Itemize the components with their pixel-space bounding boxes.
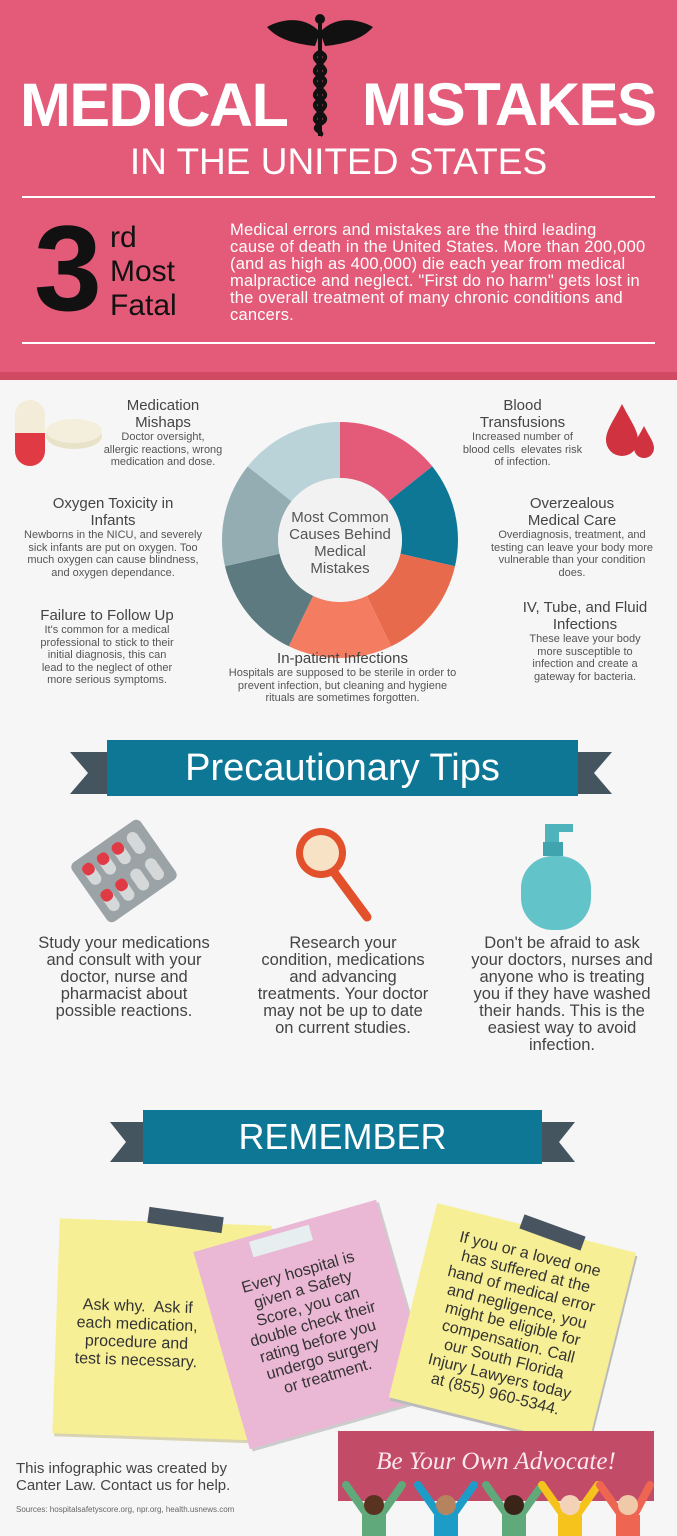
note: lawyers	[389, 1203, 636, 1447]
note: safety score: Every hospital is	[240, 1248, 356, 1296]
intro text: cause of death in the United States. More than 200,000	[230, 238, 645, 256]
cause: in-patient infections: rituals are sometimes forgotten.	[265, 692, 420, 704]
note: lawyers: has suffered at the	[459, 1248, 592, 1296]
tip: ask	[471, 934, 653, 1054]
donut chart: Most Common	[291, 509, 389, 526]
cause: oxygen toxicity: Oxygen Toxicity in	[53, 495, 173, 512]
cause: overzealous care: does.	[559, 566, 585, 578]
banner: remember: REMEMBER	[238, 1116, 447, 1157]
cause: overzealous care: Overdiagnosis, treatment, and	[498, 529, 646, 541]
cause: medication mishaps: medication and dose.	[111, 456, 215, 468]
cause: blood transfusions: blood cells elevates risk	[463, 444, 582, 456]
tip: research: treatments. Your doctor	[258, 985, 428, 1003]
cause: oxygen toxicity: and oxygen dependance.	[51, 566, 175, 578]
intro text: malpractice and neglect. "First do no harm" gets lost in	[230, 272, 640, 290]
intro text: (and as high as 400,000) die each year from medical	[230, 255, 625, 273]
note: lawyers: and negligence, you	[445, 1281, 589, 1333]
note: lawyers: at (855) 960-5344.	[429, 1370, 561, 1419]
cause: failure to follow up: Failure to Follow Up	[40, 607, 174, 624]
intro text: the overall treatment of many chronic conditions and	[230, 289, 623, 307]
tip: ask: Don't be afraid to ask	[484, 934, 640, 952]
note: safety score	[193, 1200, 433, 1449]
tip: medications: Study your medications	[38, 934, 210, 952]
cause: IV infections: IV, Tube, and Fluid	[523, 599, 647, 616]
cause: in-patient infections: prevent infection, but cleaning and hygiene	[238, 680, 447, 692]
note: safety score: double check their	[248, 1298, 378, 1350]
tip: ask: easiest way to avoid	[488, 1019, 636, 1037]
banner: remember	[110, 1110, 575, 1164]
cause: oxygen toxicity: Newborns in the NICU, and severely	[24, 529, 202, 541]
cause: blood transfusions: Blood	[503, 397, 542, 414]
people	[342, 1481, 654, 1536]
icon: pills	[15, 400, 102, 466]
note: safety score: undergo surgery	[264, 1334, 381, 1383]
note: lawyers: hand of medical error	[446, 1263, 597, 1316]
cause: failure to follow up: professional to stick to their	[40, 636, 174, 648]
banner: precautionary tips: Precautionary Tips	[185, 747, 500, 789]
note: ask why: each medication,	[76, 1314, 198, 1335]
cause: oxygen toxicity: much oxygen can cause blindness,	[27, 554, 199, 566]
note: safety score: Score, you can	[254, 1284, 362, 1330]
header panel	[0, 0, 677, 380]
tip: medications	[38, 934, 210, 1020]
cause: oxygen toxicity: sick infants are put on oxygen. Too	[28, 542, 198, 554]
tip: ask: you if they have washed	[473, 985, 651, 1003]
cause: blood transfusions: Increased number of	[472, 431, 573, 443]
cause: IV infections: Infections	[553, 616, 617, 633]
donut chart: Mistakes	[310, 560, 370, 577]
icon: caduceus	[267, 14, 373, 137]
tape strips	[147, 1207, 224, 1233]
cause: medication mishaps: Doctor oversight,	[121, 431, 205, 443]
intro text: Medical errors and mistakes are the third leading	[230, 221, 597, 239]
tip: medications: pharmacist about	[61, 985, 187, 1003]
icon: magnifier	[296, 828, 372, 922]
cause: medication mishaps: Mishaps	[135, 414, 191, 431]
tip: research	[258, 934, 428, 1037]
intro text	[230, 221, 645, 324]
title	[20, 71, 656, 139]
tip: research: and advancing	[289, 968, 397, 986]
cause: IV infections: These leave your body	[529, 633, 641, 645]
note: ask why	[52, 1218, 272, 1441]
note: lawyers: Injury Lawyers today	[426, 1351, 573, 1403]
note: lawyers: If you or a loved one	[458, 1229, 602, 1280]
note: ask why: Ask why. Ask if	[83, 1296, 193, 1317]
cause: failure to follow up	[40, 607, 174, 686]
note: lawyers: might be eligible for	[443, 1299, 582, 1350]
tip: ask: their hands. This is the	[479, 1002, 645, 1020]
title: MEDICAL	[20, 71, 287, 139]
cause: medication mishaps	[104, 397, 222, 468]
cause: IV infections: infection and create a	[532, 658, 638, 670]
cause: in-patient infections: Hospitals are supposed to be sterile in order to	[229, 667, 456, 679]
note: safety score: or treatment.	[282, 1355, 374, 1397]
cause: IV infections	[523, 599, 647, 682]
tip: medications: doctor, nurse and	[60, 968, 188, 986]
advocate banner	[338, 1431, 654, 1536]
donut chart: Causes Behind	[289, 526, 391, 543]
note: ask why: procedure and	[85, 1332, 188, 1352]
cause: in-patient infections	[229, 650, 456, 704]
note: ask why: test is necessary.	[74, 1349, 197, 1371]
cause: overzealous care	[491, 495, 653, 578]
tip: research: on current studies.	[275, 1019, 411, 1037]
icon: soap dispenser	[521, 824, 591, 930]
note: safety score: given a Safety	[252, 1267, 354, 1312]
cause: failure to follow up: initial diagnosis, this can	[48, 649, 166, 661]
cause: medication mishaps: Medication	[127, 397, 199, 414]
note: safety score: rating before you	[258, 1317, 378, 1366]
tip: ask: infection.	[529, 1036, 595, 1054]
title: MISTAKES	[362, 71, 656, 138]
banner: precautionary tips	[70, 740, 612, 796]
sources: Sources: hospitalsafetyscore.org, npr.org, health.usnews.com	[16, 1505, 234, 1514]
stat: 3rd most fatal: rd	[110, 221, 137, 254]
cause: in-patient infections: In-patient Infections	[277, 650, 408, 667]
advocate banner: Be Your Own Advocate!	[376, 1448, 616, 1475]
icon: pill blister	[71, 820, 177, 922]
cause: blood transfusions: of infection.	[494, 456, 551, 468]
footer text: This infographic was created by Canter Law. Contact us for help.	[16, 1460, 230, 1494]
tip: medications: possible reactions.	[56, 1002, 192, 1020]
cause: failure to follow up: It's common for a medical	[44, 624, 169, 636]
donut chart: Medical	[314, 543, 366, 560]
stat: 3rd most fatal: Most	[110, 255, 175, 288]
note: lawyers: compensation. Call	[440, 1317, 576, 1367]
tip: ask: your doctors, nurses and	[471, 951, 653, 969]
cause: failure to follow up: lead to the neglect of other	[42, 662, 172, 674]
stat: 3rd most fatal: Fatal	[110, 289, 177, 322]
intro text: cancers.	[230, 306, 294, 324]
cause: blood transfusions	[463, 397, 582, 468]
icon: blood drops	[606, 404, 654, 458]
stat: 3rd most fatal: 3	[34, 200, 102, 336]
cause: overzealous care: vulnerable than your condition	[499, 554, 645, 566]
cause: IV infections: gateway for bacteria.	[534, 670, 636, 682]
tip: ask: anyone who is treating	[479, 968, 645, 986]
cause: oxygen toxicity	[24, 495, 202, 578]
tip: medications: and consult with your	[46, 951, 202, 969]
cause: overzealous care: testing can leave your body more	[491, 542, 653, 554]
cause: oxygen toxicity: Infants	[90, 512, 136, 529]
tip: research: Research your	[289, 934, 397, 952]
cause: overzealous care: Medical Care	[528, 512, 616, 529]
cause: medication mishaps: allergic reactions, wrong	[104, 444, 222, 456]
tip: research: condition, medications	[261, 951, 425, 969]
donut chart	[222, 422, 458, 658]
subtitle: IN THE UNITED STATES	[130, 141, 547, 182]
stat: 3rd most fatal	[34, 200, 177, 336]
cause: IV infections: more susceptible to	[537, 646, 633, 658]
cause: blood transfusions: Transfusions	[480, 414, 565, 431]
note: lawyers: our South Florida	[442, 1336, 566, 1383]
tip: research: may not be up to date	[263, 1002, 423, 1020]
cause: failure to follow up: more serious symptoms.	[47, 674, 167, 686]
cause: overzealous care: Overzealous	[530, 495, 614, 512]
